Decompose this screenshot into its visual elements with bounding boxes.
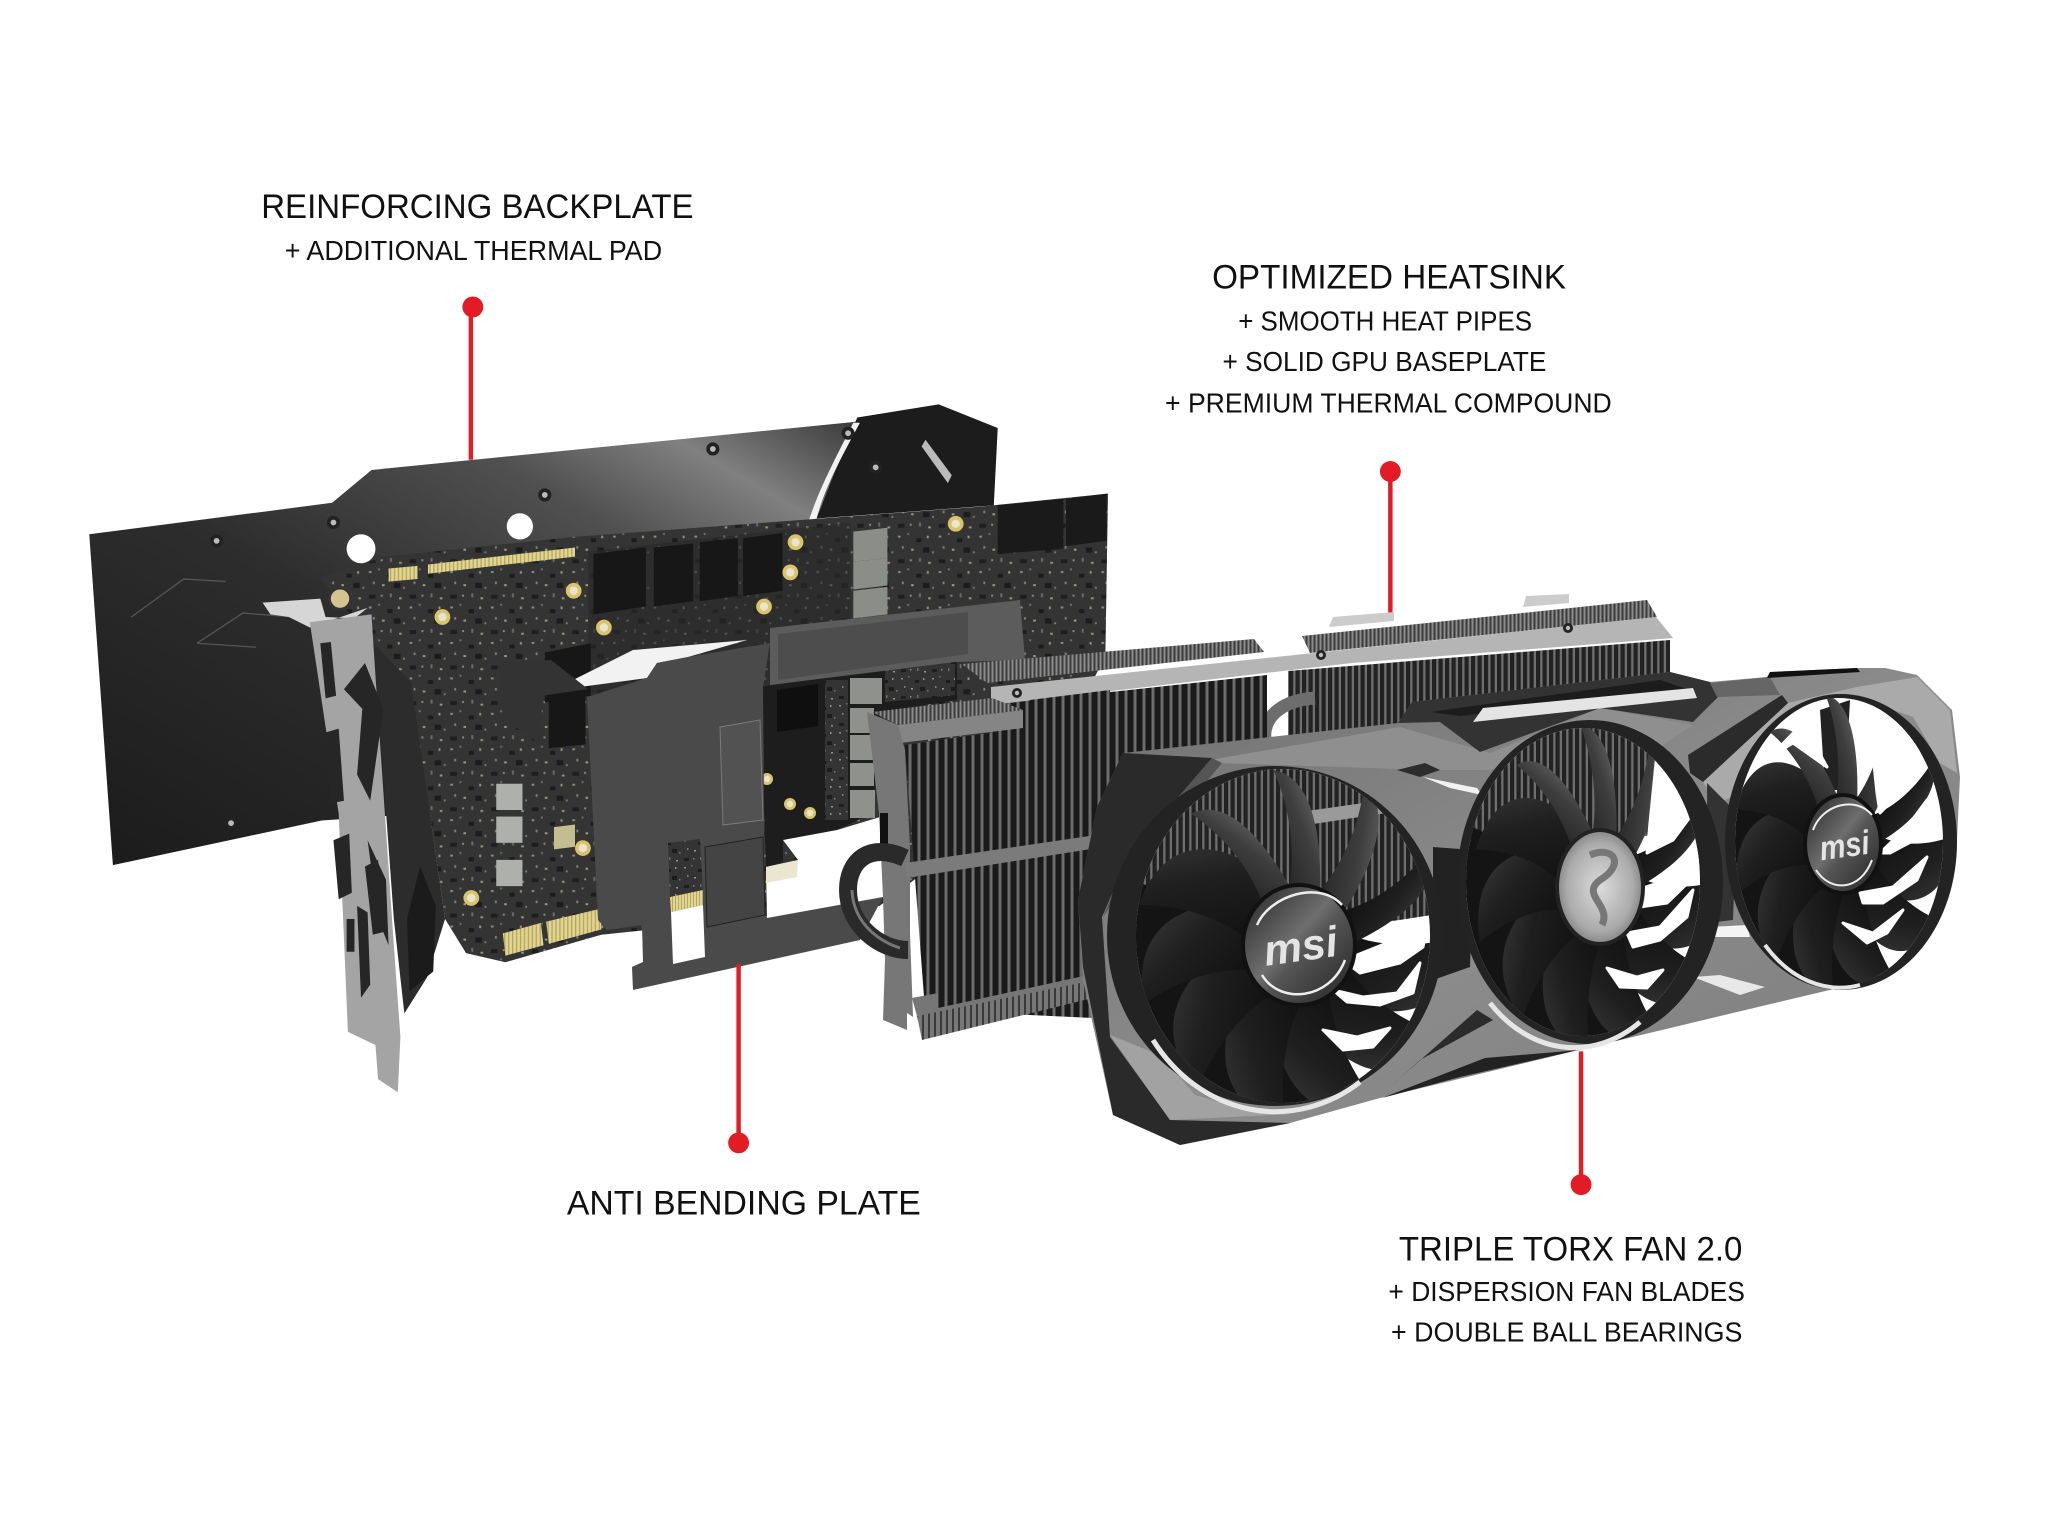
PCIe gold connector bottom (503, 923, 543, 956)
PCIe gold connector top (389, 566, 417, 582)
capacitors and mounting holes (435, 609, 450, 625)
fan hub msi (1243, 885, 1355, 1005)
VRM chokes (853, 528, 887, 618)
PCB circuit board (320, 494, 1108, 962)
memory chips (545, 533, 782, 748)
callout line: backplate (462, 296, 483, 460)
front heatsink block fins (905, 690, 1135, 1020)
heatsink light strip (991, 617, 1673, 705)
lower left highlight wedge (1110, 1035, 1293, 1120)
backplate rear shroud (817, 404, 998, 519)
label: optimized heatsink: OPTIMIZED HEATSINK (1212, 259, 1566, 297)
label: triple torx fan (1388, 1230, 1745, 1347)
main plate body (587, 643, 883, 990)
light panel top right (1703, 677, 1957, 803)
anti bending plate (499, 600, 1025, 990)
label: optimized heatsink (1165, 259, 1612, 419)
label: triple torx fan: TRIPLE TORX FAN 2.0 (1399, 1230, 1742, 1268)
callout line: anti bending plate (728, 964, 749, 1153)
vent slots (1423, 777, 1482, 795)
label: anti bending plate: ANTI BENDING PLATE (567, 1185, 921, 1223)
label: optimized heatsink: + SOLID GPU BASEPLATE (1223, 346, 1546, 377)
white opening (766, 817, 887, 918)
optimized heatsink (848, 594, 1673, 1040)
shroud top raised frame (1398, 672, 1720, 752)
power connectors (998, 494, 1107, 554)
I/O bracket (263, 588, 445, 1092)
board visible through plate (760, 662, 957, 867)
rear heatsink block (1288, 640, 1670, 840)
triple torx fan shroud (1078, 668, 1960, 1145)
front heat pipe (848, 852, 908, 950)
infographic: exploded graphics card with callouts (89, 194, 1960, 1342)
left dark panel (1078, 753, 1290, 1145)
fan 1 (1107, 766, 1438, 1114)
dark diagonal between fans 2 and 3 (1688, 695, 1788, 782)
callout line: fan (1571, 1051, 1592, 1195)
graphics card exploded view (89, 404, 1960, 1145)
top plate section (770, 600, 1025, 685)
card edge shroud (374, 650, 445, 1013)
label: triple torx fan: + DISPERSION FAN BLADES (1388, 1276, 1745, 1307)
fan 3 (1725, 694, 1957, 990)
reinforcing backplate (89, 404, 998, 865)
label: reinforcing backplate: REINFORCING BACKPLATE (261, 188, 694, 226)
rear heat pipe (1265, 698, 1315, 740)
label: optimized heatsink: + SMOOTH HEAT PIPES (1238, 305, 1532, 336)
label: optimized heatsink: + PREMIUM THERMAL COMPOUND (1165, 388, 1612, 419)
dark panels between fans (1433, 847, 1473, 980)
lower dark wedges (1390, 1010, 1493, 1087)
fan hub dragon (1557, 830, 1643, 944)
label: triple torx fan: + DOUBLE BALL BEARINGS (1391, 1316, 1742, 1347)
fan hub msi: msi (1261, 918, 1342, 976)
fan hub msi (1805, 795, 1881, 893)
fan hub msi: msi (1817, 824, 1873, 868)
middle heatsink block (991, 675, 1267, 920)
white top sliver (573, 640, 747, 687)
black clip (499, 660, 588, 746)
label: reinforcing backplate: + ADDITIONAL THERMAL PAD (285, 235, 662, 266)
bracket tab (263, 599, 368, 628)
label: reinforcing backplate (261, 188, 694, 266)
fan 2 (1457, 720, 1727, 1071)
callout line: heatsink (1380, 461, 1401, 616)
